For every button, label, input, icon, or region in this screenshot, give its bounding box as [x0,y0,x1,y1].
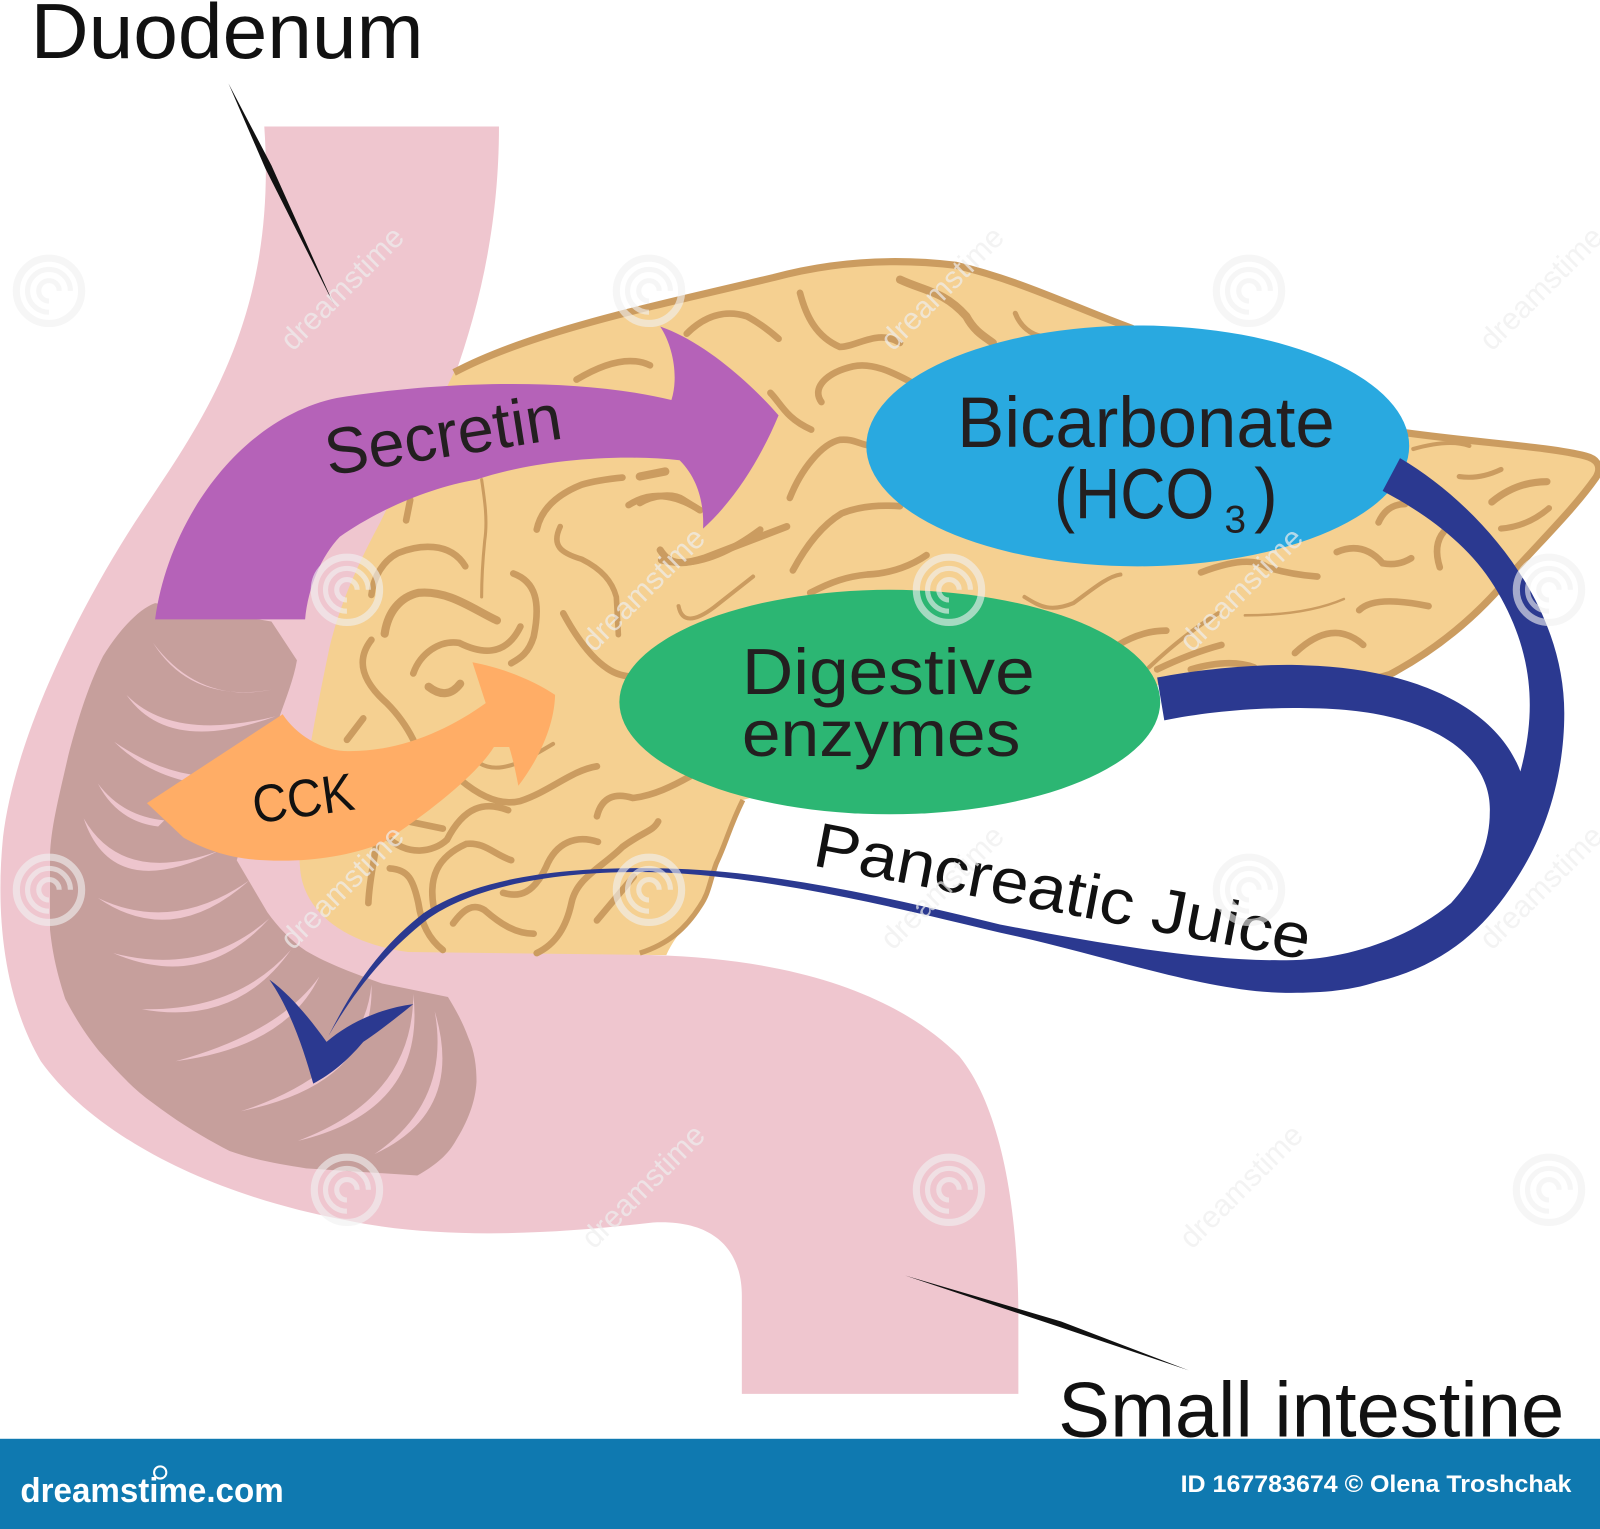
watermark spirals and text: dreamstime [1173,521,1310,658]
watermark spirals and text: dreamstime [575,1118,712,1255]
footer: dreamstime logo: dreamstime.com [20,1472,284,1510]
label: Bicarbonate (HCO3): 3 [1224,499,1246,542]
watermark spirals and text: dreamstime [874,220,1011,357]
intestine: duodenum and small intestine [0,127,1018,1394]
watermark spirals and text [16,220,1600,1255]
watermark spirals and text: dreamstime [575,521,712,658]
label: Pancreatic Juice: Pancreatic Juice [809,810,1317,974]
pointer line: small intestine [905,1276,1189,1370]
watermark spirals and text: dreamstime [274,819,411,956]
label: Bicarbonate (HCO3): ) [1254,454,1278,534]
watermark spirals and text: dreamstime [1173,1118,1310,1255]
pancreatic duct [329,458,1564,1036]
watermark spirals and text: dreamstime [874,819,1011,956]
icon: duct opening arrowhead [269,980,413,1084]
footer: image credit: ID 167783674 © Olena Troshchak [1181,1471,1572,1498]
pancreas lobule texture [347,280,1549,953]
pointer line: duodenum [229,84,334,304]
bicarbonate ellipse [866,326,1409,566]
label: Bicarbonate (HCO3): Bicarbonate [957,383,1335,463]
digestive enzymes ellipse [619,590,1160,814]
label: Small intestine: Small intestine [1058,1368,1564,1454]
label: Secretin: Secretin [319,380,567,489]
arrow: CCK [147,662,555,861]
watermark spirals and text: dreamstime [274,220,411,357]
duodenum inner lining with folds [50,603,477,1176]
label: CCK: CCK [249,763,358,835]
label: Digestive enzymes: enzymes [742,697,1020,770]
arrow: secretin [155,327,779,619]
label: Bicarbonate (HCO3): (HCO [1054,454,1214,534]
label: Digestive enzymes [742,635,1035,770]
pancreas [299,262,1599,955]
label: Digestive enzymes: Digestive [742,635,1035,708]
label: Bicarbonate (HCO3) [957,383,1335,542]
footer bar [0,1439,1600,1529]
